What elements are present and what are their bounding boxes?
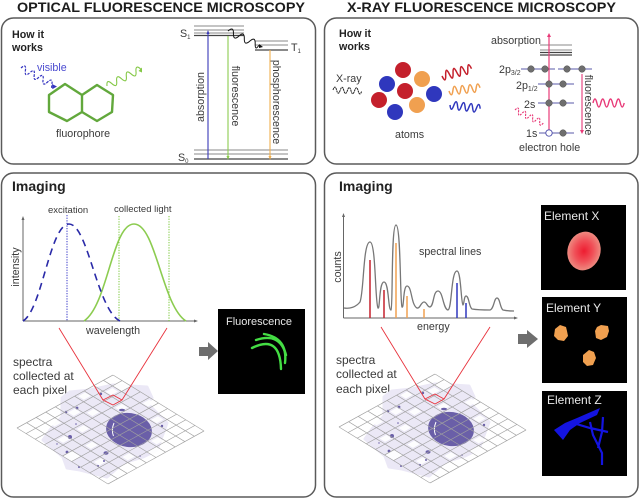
energy level diagram: 2p <box>499 64 511 76</box>
chart: counts vs energy <box>332 213 518 333</box>
energy level diagram: 1s <box>526 128 537 140</box>
heading: how it works: works <box>11 42 43 54</box>
icon: dashed pink wave <box>514 107 545 126</box>
heading: imaging: Imaging <box>12 178 66 194</box>
element y image: Element Y <box>546 301 601 315</box>
red collection cone <box>59 328 167 405</box>
jablonski energy diagram: 0 <box>185 159 189 165</box>
element z image <box>542 391 627 476</box>
chart: intensity vs wavelength: collected light <box>114 204 172 215</box>
label: spectra collected at each pixel: spectra <box>13 355 52 369</box>
element z image: Element Z <box>547 393 602 407</box>
fluorescence image <box>218 309 305 394</box>
red collection cone <box>381 327 490 404</box>
label: x-ray with wave <box>333 73 362 94</box>
chart: intensity vs wavelength: wavelength <box>85 325 140 337</box>
panel: optical imaging <box>2 173 316 497</box>
panel: optical how it works <box>2 18 316 165</box>
energy level diagram: 2p <box>516 80 528 92</box>
label: spectra collected at each pixel: collected at <box>13 369 74 383</box>
jablonski energy diagram: 1 <box>298 49 302 55</box>
fluorescence arrow: fluorescence <box>582 75 594 135</box>
heading: how it works: How it <box>339 28 371 40</box>
intersystem crossing wave <box>227 28 263 49</box>
chart: counts vs energy: spectral lines <box>419 246 481 258</box>
element x image: Element X <box>544 209 599 223</box>
heading: imaging: Imaging <box>339 178 393 194</box>
atoms cluster <box>371 62 442 120</box>
icon: emitted green wave <box>105 66 142 89</box>
jablonski energy diagram: S <box>178 152 185 164</box>
chart: counts vs energy: energy <box>417 321 450 333</box>
energy level diagram: 3/2 <box>511 70 521 77</box>
absorption arrow: absorption <box>195 72 207 122</box>
arrow <box>199 342 218 360</box>
label: spectra collected at each pixel: spectra <box>336 353 375 367</box>
energy level diagram: absorption <box>491 35 541 47</box>
jablonski energy diagram <box>178 26 302 165</box>
jablonski energy diagram: T <box>291 42 298 54</box>
label: fluorophore: fluorophore <box>56 128 110 140</box>
label: spectra collected at each pixel: each pixel <box>13 383 67 397</box>
label: spectra collected at each pixel: each pixel <box>336 382 390 396</box>
energy level diagram: 1/2 <box>528 86 538 93</box>
fluorescence arrow: fluorescence <box>229 66 241 126</box>
label: x-ray with wave: X-ray <box>336 73 362 85</box>
icon: fluorophore molecule <box>49 84 113 121</box>
panel: x-ray how it works <box>324 18 638 164</box>
heading: how it works: How it <box>12 29 44 41</box>
chart: intensity vs wavelength <box>10 204 198 337</box>
sample grid with cell <box>17 375 204 484</box>
panel: x-ray imaging <box>324 173 638 497</box>
element y image <box>542 297 627 383</box>
element x image <box>541 205 626 290</box>
energy level diagram <box>491 33 624 154</box>
emitted waves <box>441 64 481 113</box>
phosphorescence arrow: phosphorescence <box>270 60 282 144</box>
energy level diagram: 2s <box>524 99 535 111</box>
chart: intensity vs wavelength: excitation <box>48 205 88 216</box>
label: spectra collected at each pixel: collected at <box>336 367 397 381</box>
icon: visible light wave <box>19 62 67 89</box>
icon: visible light wave: visible <box>37 62 67 74</box>
sample grid with cell <box>339 374 526 483</box>
arrow <box>518 330 538 348</box>
chart: intensity vs wavelength: intensity <box>10 247 22 287</box>
heading: how it works: works <box>338 41 370 53</box>
fluorescence image: Fluorescence <box>226 316 292 328</box>
jablonski energy diagram: 1 <box>187 35 191 41</box>
icon: pink emitted wave <box>593 99 624 107</box>
label: atoms: atoms <box>395 129 424 141</box>
chart: counts vs energy: counts <box>332 251 344 283</box>
energy level diagram: electron hole <box>519 142 580 154</box>
jablonski energy diagram: S <box>180 28 187 40</box>
